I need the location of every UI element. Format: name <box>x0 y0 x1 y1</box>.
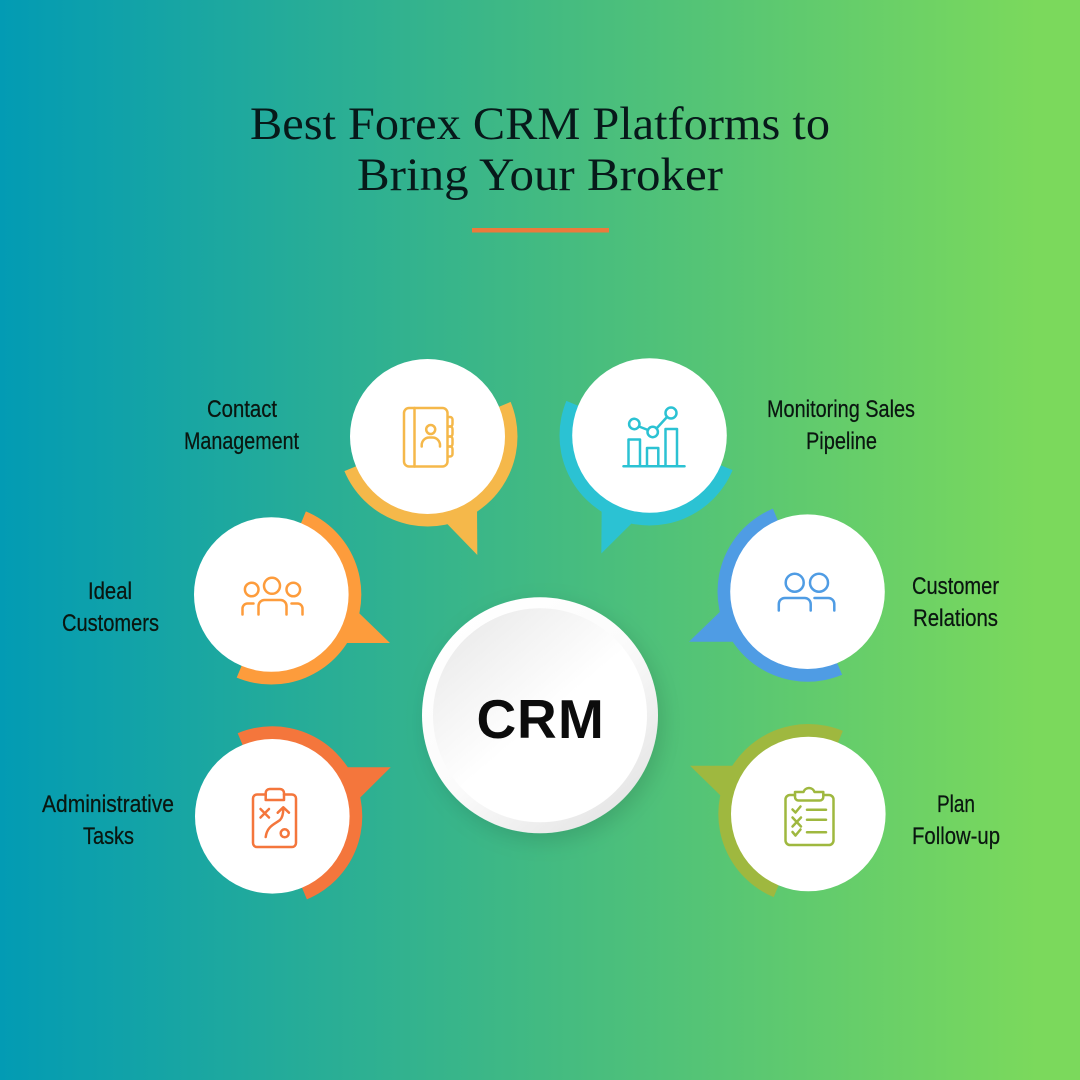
label: administrative tasks: Tasks <box>83 823 134 850</box>
icon: three people <box>242 578 302 614</box>
label: contact management <box>184 396 299 455</box>
label: ideal customers <box>62 578 159 637</box>
title: Bring Your Broker <box>357 149 723 201</box>
central CRM hub <box>422 597 658 833</box>
label: ideal customers: Customers <box>62 610 159 637</box>
label: contact management: Contact <box>207 396 277 423</box>
label: customer relations <box>912 573 999 632</box>
icon: strategy clipboard <box>253 789 296 847</box>
node: contact management <box>344 359 517 555</box>
title: Best Forex CRM Platforms to <box>250 98 830 150</box>
label: contact management: Management <box>184 428 299 455</box>
node: ideal customers <box>194 511 390 685</box>
node: plan follow-up <box>690 724 886 897</box>
icon: two people <box>779 574 834 610</box>
label: plan follow-up: Plan <box>937 791 975 818</box>
node: administrative tasks <box>195 726 391 899</box>
title <box>250 98 830 201</box>
icon: address book <box>404 408 452 466</box>
label: monitoring sales pipeline: Monitoring Sales <box>767 396 915 423</box>
node: customer relations <box>689 509 885 682</box>
label: plan follow-up: Follow-up <box>912 823 1000 850</box>
label: monitoring sales pipeline: Pipeline <box>806 428 877 455</box>
node: monitoring sales pipeline <box>559 358 733 554</box>
label: plan follow-up <box>912 791 1000 850</box>
CRM text: CRM <box>476 688 604 750</box>
label: customer relations: Relations <box>913 605 998 632</box>
label: monitoring sales pipeline <box>767 396 915 455</box>
label: administrative tasks <box>42 791 174 850</box>
label: administrative tasks: Administrative <box>42 791 174 818</box>
icon: line and bar chart <box>624 408 684 466</box>
label: ideal customers: Ideal <box>88 578 132 605</box>
label: customer relations: Customer <box>912 573 999 600</box>
icon: checklist clipboard <box>786 788 834 845</box>
title underline <box>472 228 609 232</box>
